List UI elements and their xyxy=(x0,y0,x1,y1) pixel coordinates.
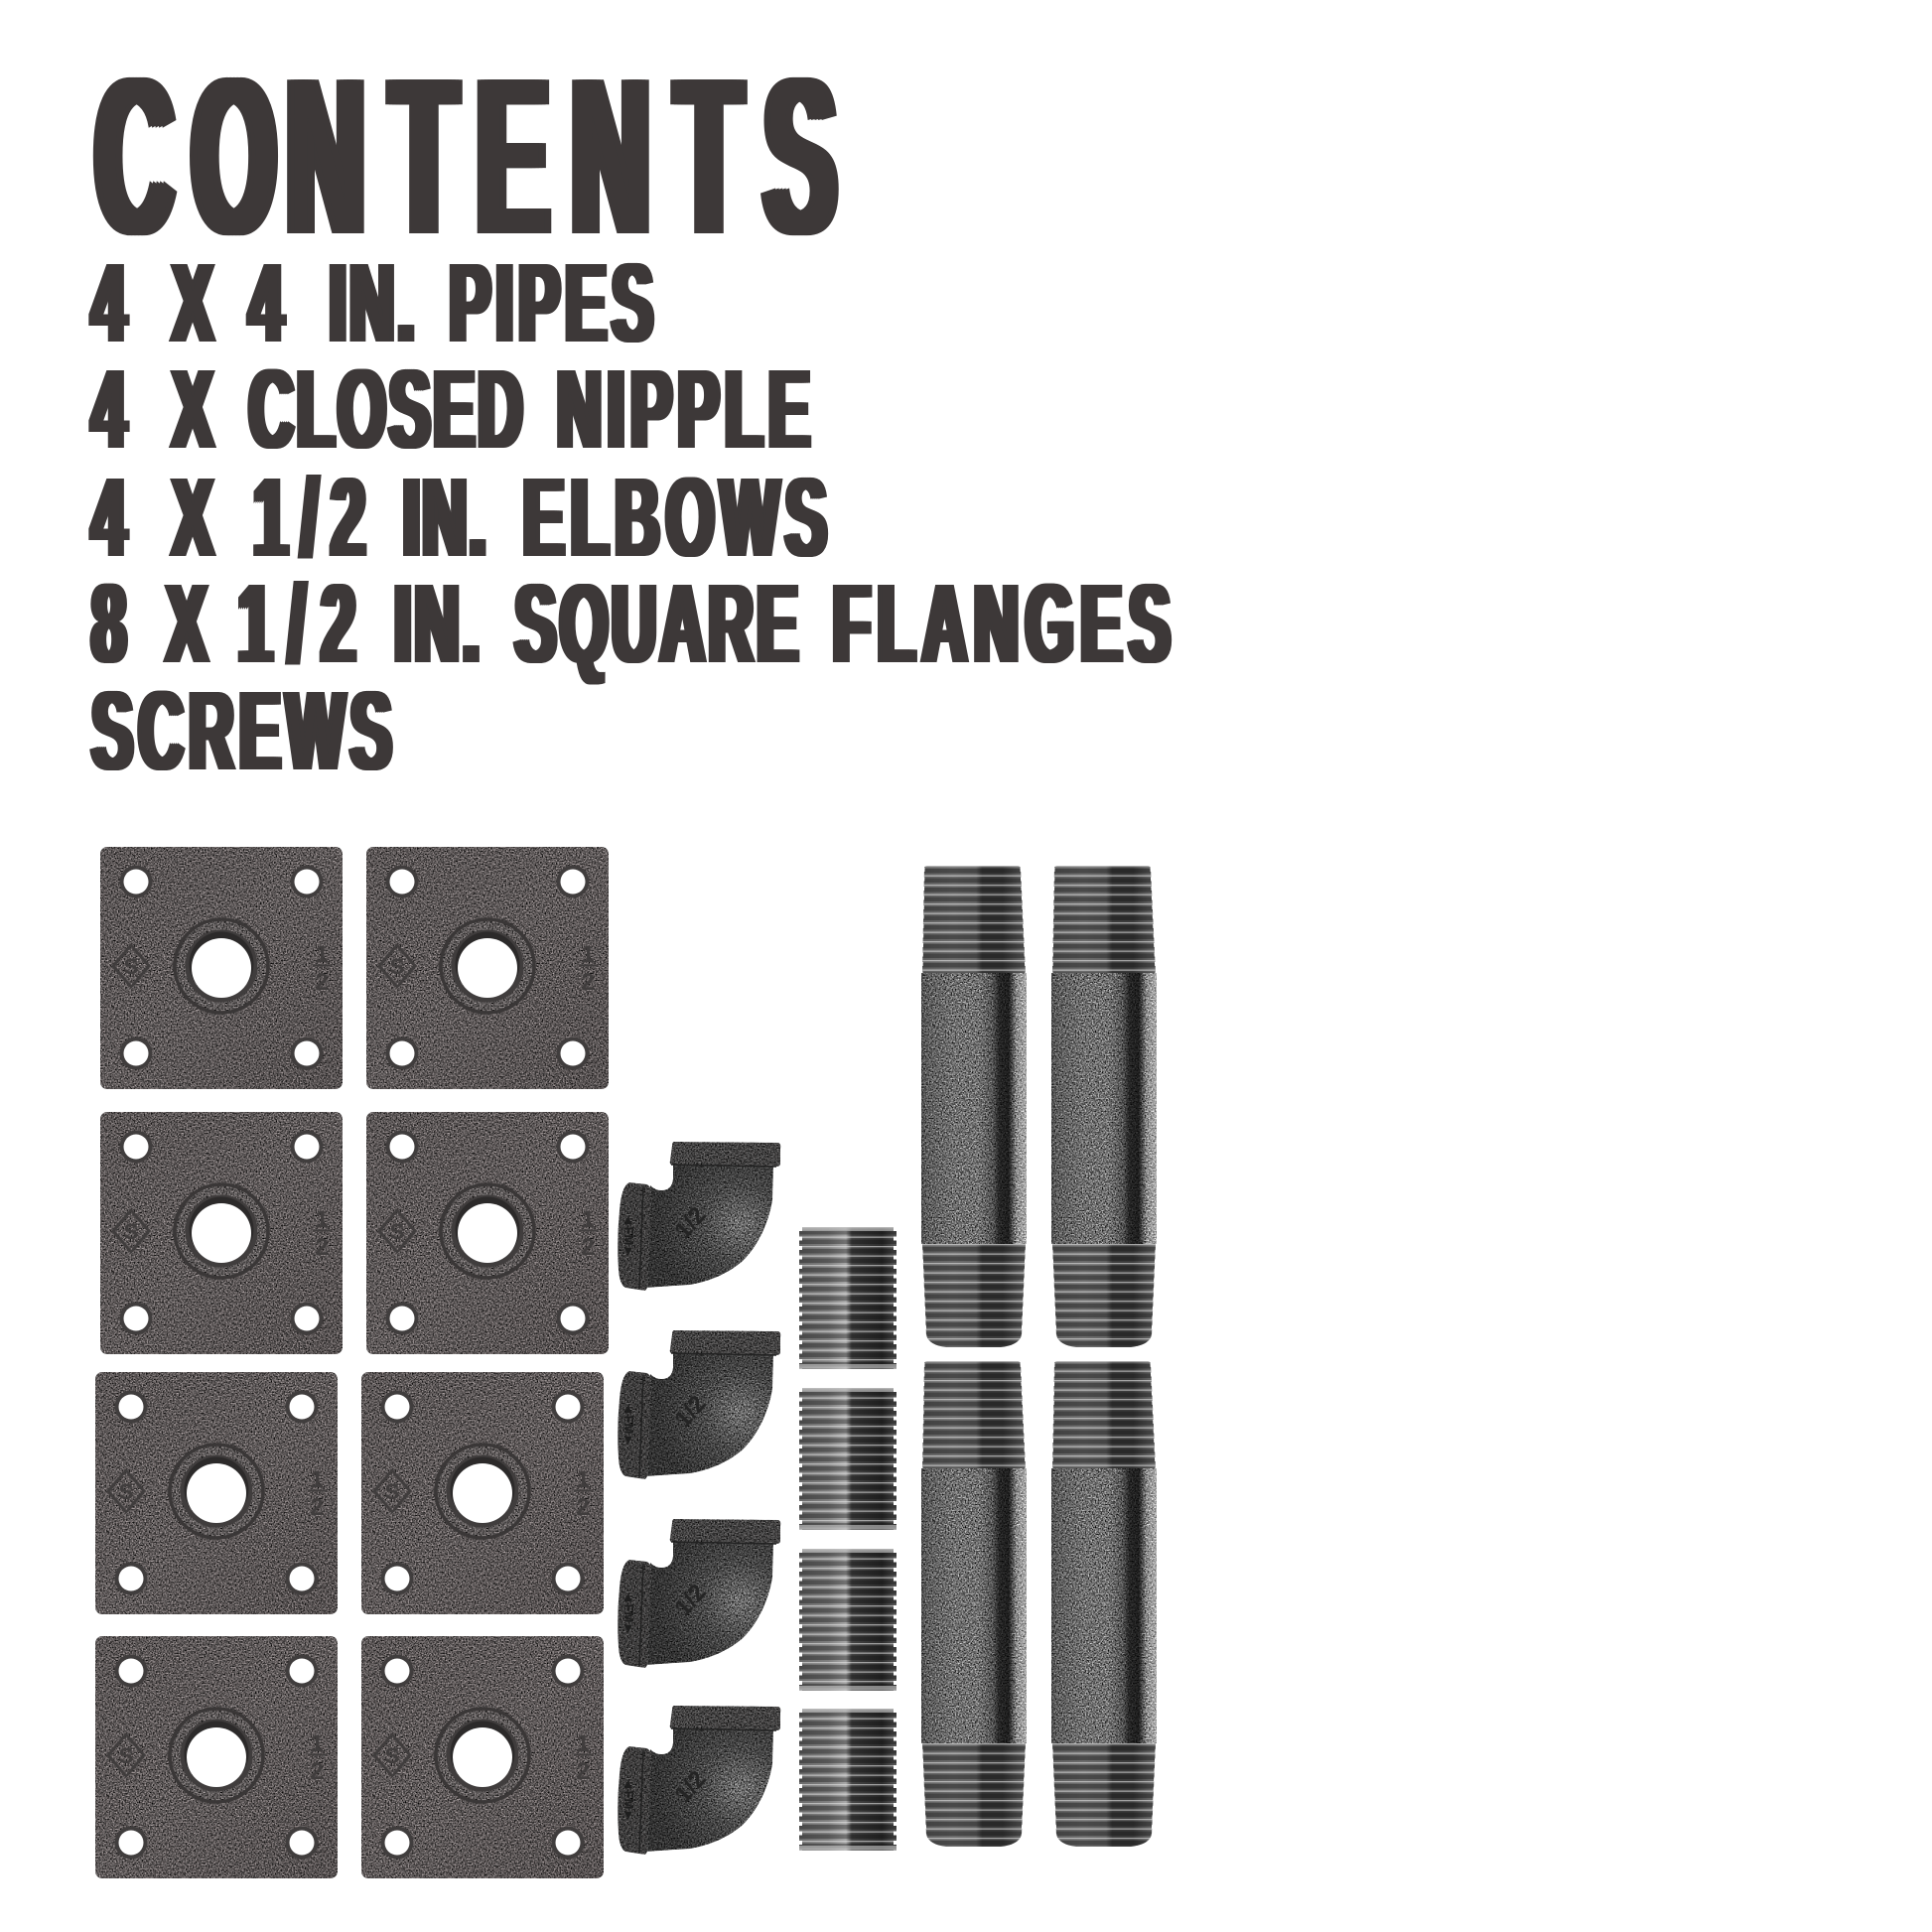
list item: elbows: ELBOWS xyxy=(523,455,833,581)
list item: elbows: IN. xyxy=(403,455,507,581)
flange 5 xyxy=(95,1372,338,1614)
closed nipple 3 xyxy=(799,1549,897,1691)
elbow 3 xyxy=(618,1519,780,1668)
elbows group xyxy=(618,1142,780,1855)
title: CONTENTS xyxy=(95,32,836,281)
list item: elbows: 4 xyxy=(91,455,143,581)
list item: pipes: PIPES xyxy=(450,240,658,366)
list item: elbows: X xyxy=(172,455,230,581)
flange 7 xyxy=(95,1636,338,1878)
list item: screws: SCREWS xyxy=(91,668,391,794)
list item: closed nipple: CLOSED xyxy=(249,346,546,473)
contents list xyxy=(91,240,1177,794)
pipe bottom left xyxy=(921,1361,1027,1847)
list item: square flanges: IN. xyxy=(394,561,503,687)
closed nipple 2 xyxy=(799,1388,897,1530)
square flanges group xyxy=(95,847,609,1878)
closed nipple 4 xyxy=(799,1709,897,1851)
list item: closed nipple: NIPPLE xyxy=(557,346,816,473)
pipes group xyxy=(921,866,1157,1847)
list item: square flanges: X xyxy=(166,561,224,687)
list item: pipes: IN. xyxy=(330,240,439,366)
flange 2 xyxy=(366,847,609,1089)
flange 1 xyxy=(100,847,343,1089)
pipe top left xyxy=(921,866,1027,1347)
list item: square flanges: SQUARE xyxy=(515,561,823,687)
closed nipples group xyxy=(799,1227,897,1851)
list item: pipes: 4 xyxy=(91,240,143,366)
list item: closed nipple: X xyxy=(172,346,230,473)
elbow 4 xyxy=(618,1706,780,1855)
list item: pipes: X xyxy=(172,240,230,366)
list item: square flanges: FLANGES xyxy=(833,561,1177,687)
closed nipple 1 xyxy=(799,1227,897,1369)
flange 3 xyxy=(100,1112,343,1354)
flange 4 xyxy=(366,1112,609,1354)
elbow 2 xyxy=(618,1330,780,1479)
list item: elbows: 1/2 xyxy=(253,455,409,581)
flange 8 xyxy=(361,1636,604,1878)
pipe bottom right xyxy=(1051,1361,1157,1847)
pipe top right xyxy=(1051,866,1157,1347)
list item: square flanges: 8 xyxy=(91,561,143,687)
list item: closed nipple: 4 xyxy=(91,346,143,473)
list item: pipes: 4 xyxy=(249,240,301,366)
list item: square flanges: 1/2 xyxy=(238,561,404,687)
flange 6 xyxy=(361,1372,604,1614)
elbow 1 xyxy=(618,1142,780,1291)
